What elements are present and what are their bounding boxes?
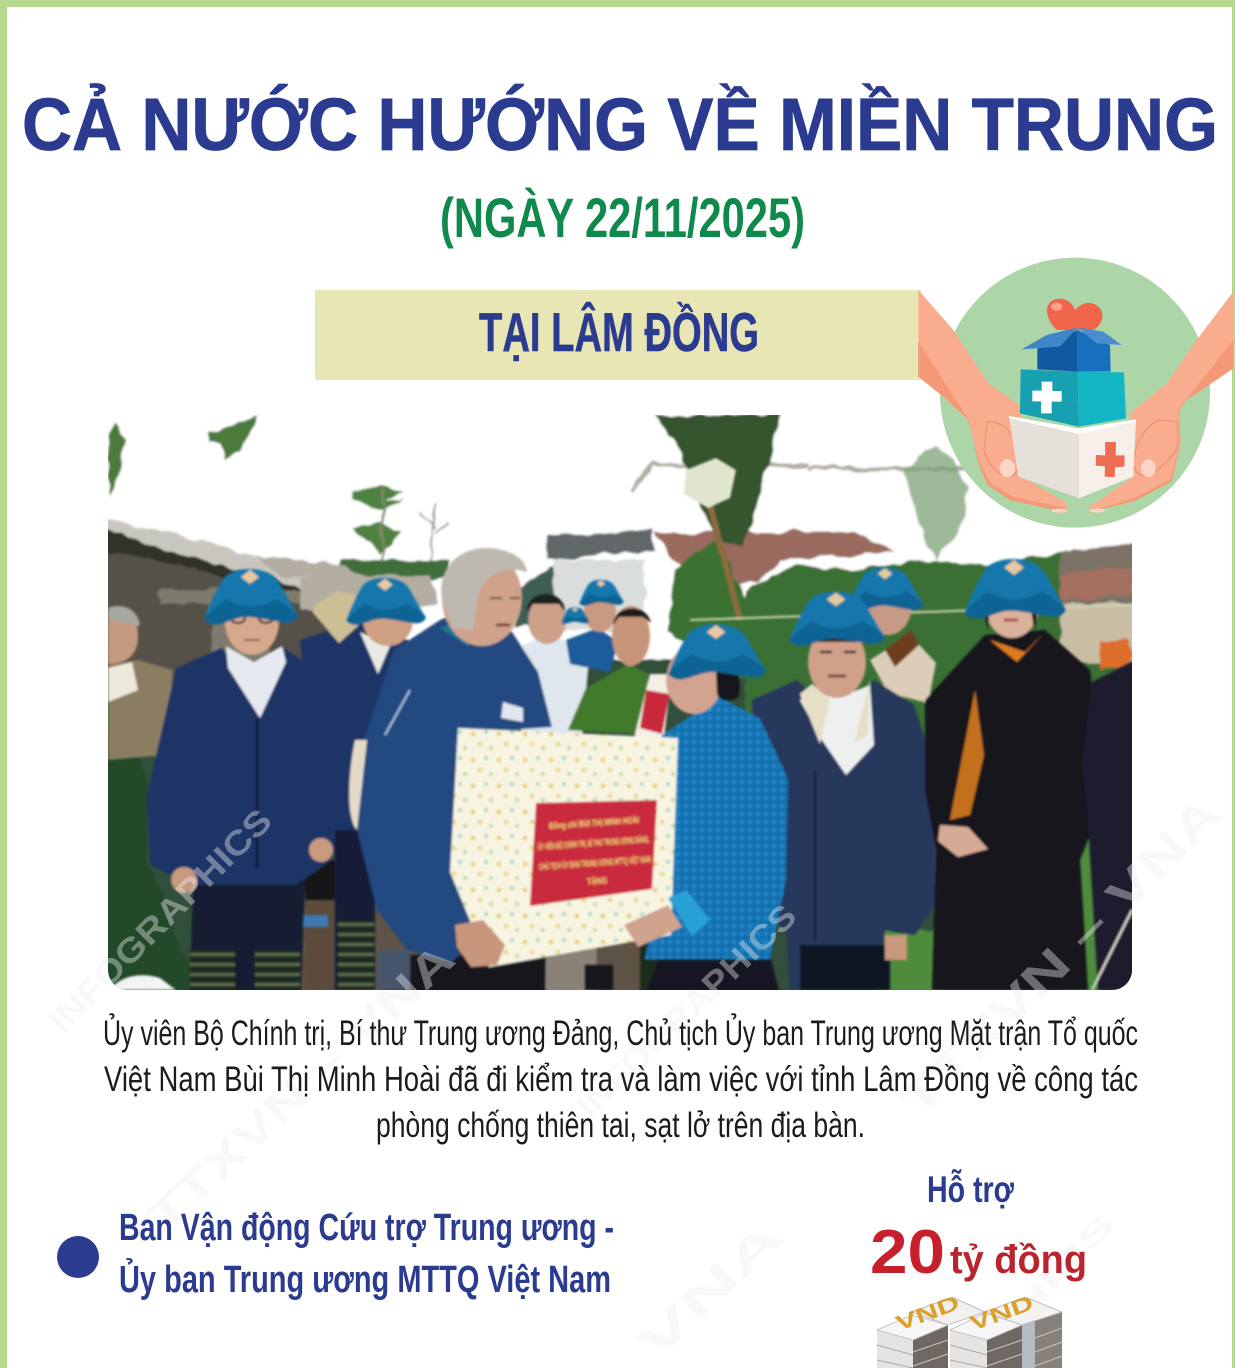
date subtitle: (NGÀY 22/11/2025): [440, 186, 805, 249]
icon: teal box: [1020, 369, 1126, 427]
person: man with helmet, second left: [300, 578, 436, 990]
section banner: Tại Lâm Đồng: [315, 290, 921, 380]
tied bag on pole: [684, 458, 740, 620]
VND labels: [893, 1292, 1037, 1336]
watermarks: INFOGRAPHICS: [41, 802, 280, 1041]
donor organisation text: Ban Vận động Cứu trợ Trung ương -: [119, 1207, 614, 1249]
gift box label text: TẶNG: [587, 875, 607, 887]
watermark highlights over the photo: INFOGRAPHICS: [41, 802, 280, 1041]
white foreground corner: [110, 975, 176, 990]
donor organisation text: [119, 1207, 614, 1301]
watermark highlights over the photo: TTXVN – VNA: [890, 786, 1231, 1127]
watermarks: VNA: [628, 1211, 793, 1368]
person: elderly man holding box: [349, 548, 552, 995]
gift box label text: Đồng chí BÙI THỊ MINH HOÀI: [549, 814, 639, 831]
watermarks: TTXVN – VNA: [138, 934, 464, 1242]
gift box label text: CHỦ TỊCH ỦY BAN TRUNG ƯƠNG MTTQ VIỆT NAM: [539, 853, 651, 872]
icon: blue box: [1022, 327, 1122, 372]
icon: white box: [1009, 416, 1136, 498]
person: woman in black coat: [925, 559, 1100, 990]
icon background circle: [940, 258, 1210, 528]
watermark highlights over the photo: TTXVN – VNA: [138, 934, 464, 1242]
icon: fingernails: [1000, 459, 1156, 513]
person: dark figure at right edge: [1082, 660, 1135, 990]
front left stack: [877, 1315, 948, 1368]
person: woman in blue jacket: [637, 624, 788, 995]
icon: hands holding medical gift boxes: [918, 258, 1233, 528]
icon: heart: [1047, 299, 1102, 331]
hands holding box: [455, 890, 710, 967]
rope in foreground: [1092, 910, 1132, 990]
gift box label text: [536, 813, 652, 890]
body paragraph: phòng chống thiên tai, sạt lở trên địa bàn.: [376, 1106, 865, 1145]
icon: left arm and hand: [918, 290, 1067, 513]
icon: stacks of VND banknotes: [877, 1292, 1062, 1368]
person: man with helmet and navy jacket, centre right: [752, 592, 935, 990]
watermark highlights over the photo: INFOGRAPHICS: [569, 897, 804, 1126]
support amount: tỷ đồng: [950, 1238, 1087, 1282]
watermark highlights over the photo: [108, 810, 1132, 990]
VND labels: VND: [967, 1292, 1037, 1336]
person: man in white shirt behind: [512, 594, 590, 738]
person: man with helmet behind: [561, 580, 624, 672]
body paragraph: [103, 1013, 1138, 1145]
person: old man far left: [108, 606, 173, 760]
watermarks: PHICS: [981, 1208, 1121, 1355]
icon: right arm and hand: [1090, 292, 1233, 513]
gift box: [450, 728, 678, 967]
section banner: Tại Lâm Đồng: TẠI LÂM ĐỒNG: [479, 301, 759, 363]
watermarks: [41, 786, 1231, 1368]
photo: officials handing a gift box to an elderly resident: [90, 400, 1150, 1010]
VND labels: VND: [893, 1292, 963, 1336]
person: police officer: [568, 606, 672, 992]
support amount: 20: [870, 1218, 945, 1287]
bullet marker: [57, 1236, 99, 1278]
watermarks: INFOGRAPHICS: [569, 897, 804, 1126]
donor organisation text: Ủy ban Trung ương MTTQ Việt Nam: [119, 1257, 611, 1301]
rope: [690, 605, 1132, 620]
watermarks: TTXVN – VNA: [890, 786, 1231, 1127]
gift box: ỦY VIÊN BỘ CHÍNH TRỊ, BÍ THƯ TRUNG ƯƠNG ĐẢNG,: [537, 833, 650, 852]
person: woman behind with brown collar: [848, 567, 936, 703]
support amount: [870, 1218, 1087, 1287]
back stacks: [912, 1297, 1062, 1368]
photo background scenery: [90, 400, 1150, 1010]
person: man with blue helmet, left: [147, 569, 333, 995]
support label: Hỗ trợ: [927, 1169, 1015, 1210]
front right stack: [950, 1313, 1062, 1368]
